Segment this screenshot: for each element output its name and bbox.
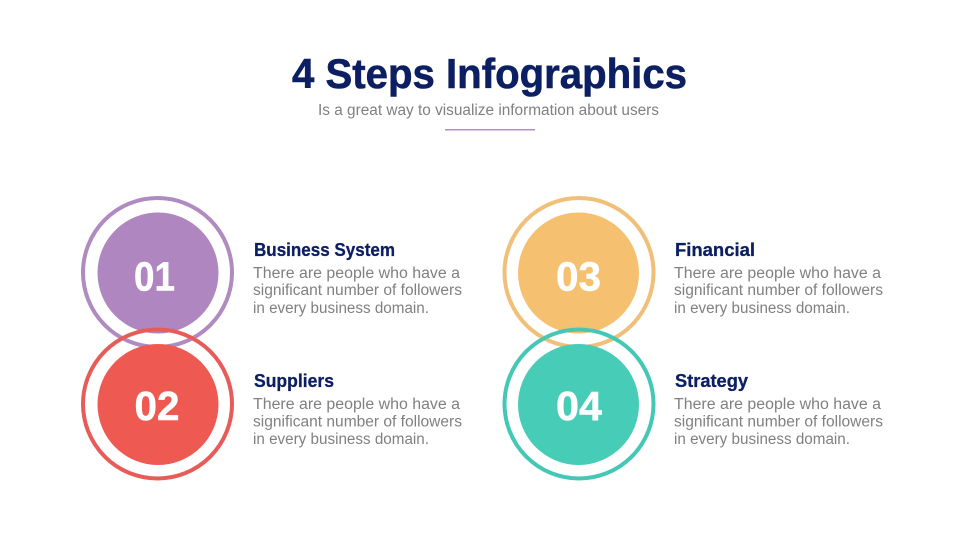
step 03 text: There are people who have a — [674, 265, 881, 282]
step 03 circle: 03 — [556, 254, 601, 300]
step 02 text: There are people who have a — [253, 396, 460, 413]
step 04 circle: 04 — [556, 383, 602, 429]
step 02 text: Suppliers — [254, 370, 334, 391]
step 03 text: in every business domain. — [674, 300, 850, 317]
step 03 text — [674, 239, 883, 317]
step 01 circle — [83, 198, 232, 347]
step 01 text: significant number of followers — [253, 282, 462, 299]
step 02 text: in every business domain. — [253, 431, 429, 448]
step 02 text — [253, 370, 462, 448]
step 04 text: There are people who have a — [674, 396, 881, 413]
step 01 text: Business System — [254, 239, 395, 260]
step 01 text — [253, 239, 462, 317]
step 02 circle: 02 — [134, 383, 180, 429]
subtitle: Is a great way to visualize information about users — [318, 102, 659, 119]
title underline — [445, 129, 535, 130]
step 01 text: in every business domain. — [253, 300, 429, 317]
step 04 text: in every business domain. — [674, 431, 850, 448]
step 04 text: Strategy — [675, 370, 749, 391]
step 03 text: Financial — [675, 239, 755, 260]
step 04 circle — [504, 330, 654, 478]
step 03 text: significant number of followers — [674, 282, 883, 299]
title: 4 Steps Infographics — [292, 50, 687, 97]
step 01 text: There are people who have a — [253, 265, 460, 282]
step 02 text: significant number of followers — [253, 414, 462, 430]
step 04 text — [674, 370, 883, 448]
step 03 circle — [504, 198, 654, 347]
step 02 circle — [83, 330, 232, 478]
step 04 text: significant number of followers — [674, 414, 883, 430]
step 01 circle: 01 — [134, 254, 175, 300]
